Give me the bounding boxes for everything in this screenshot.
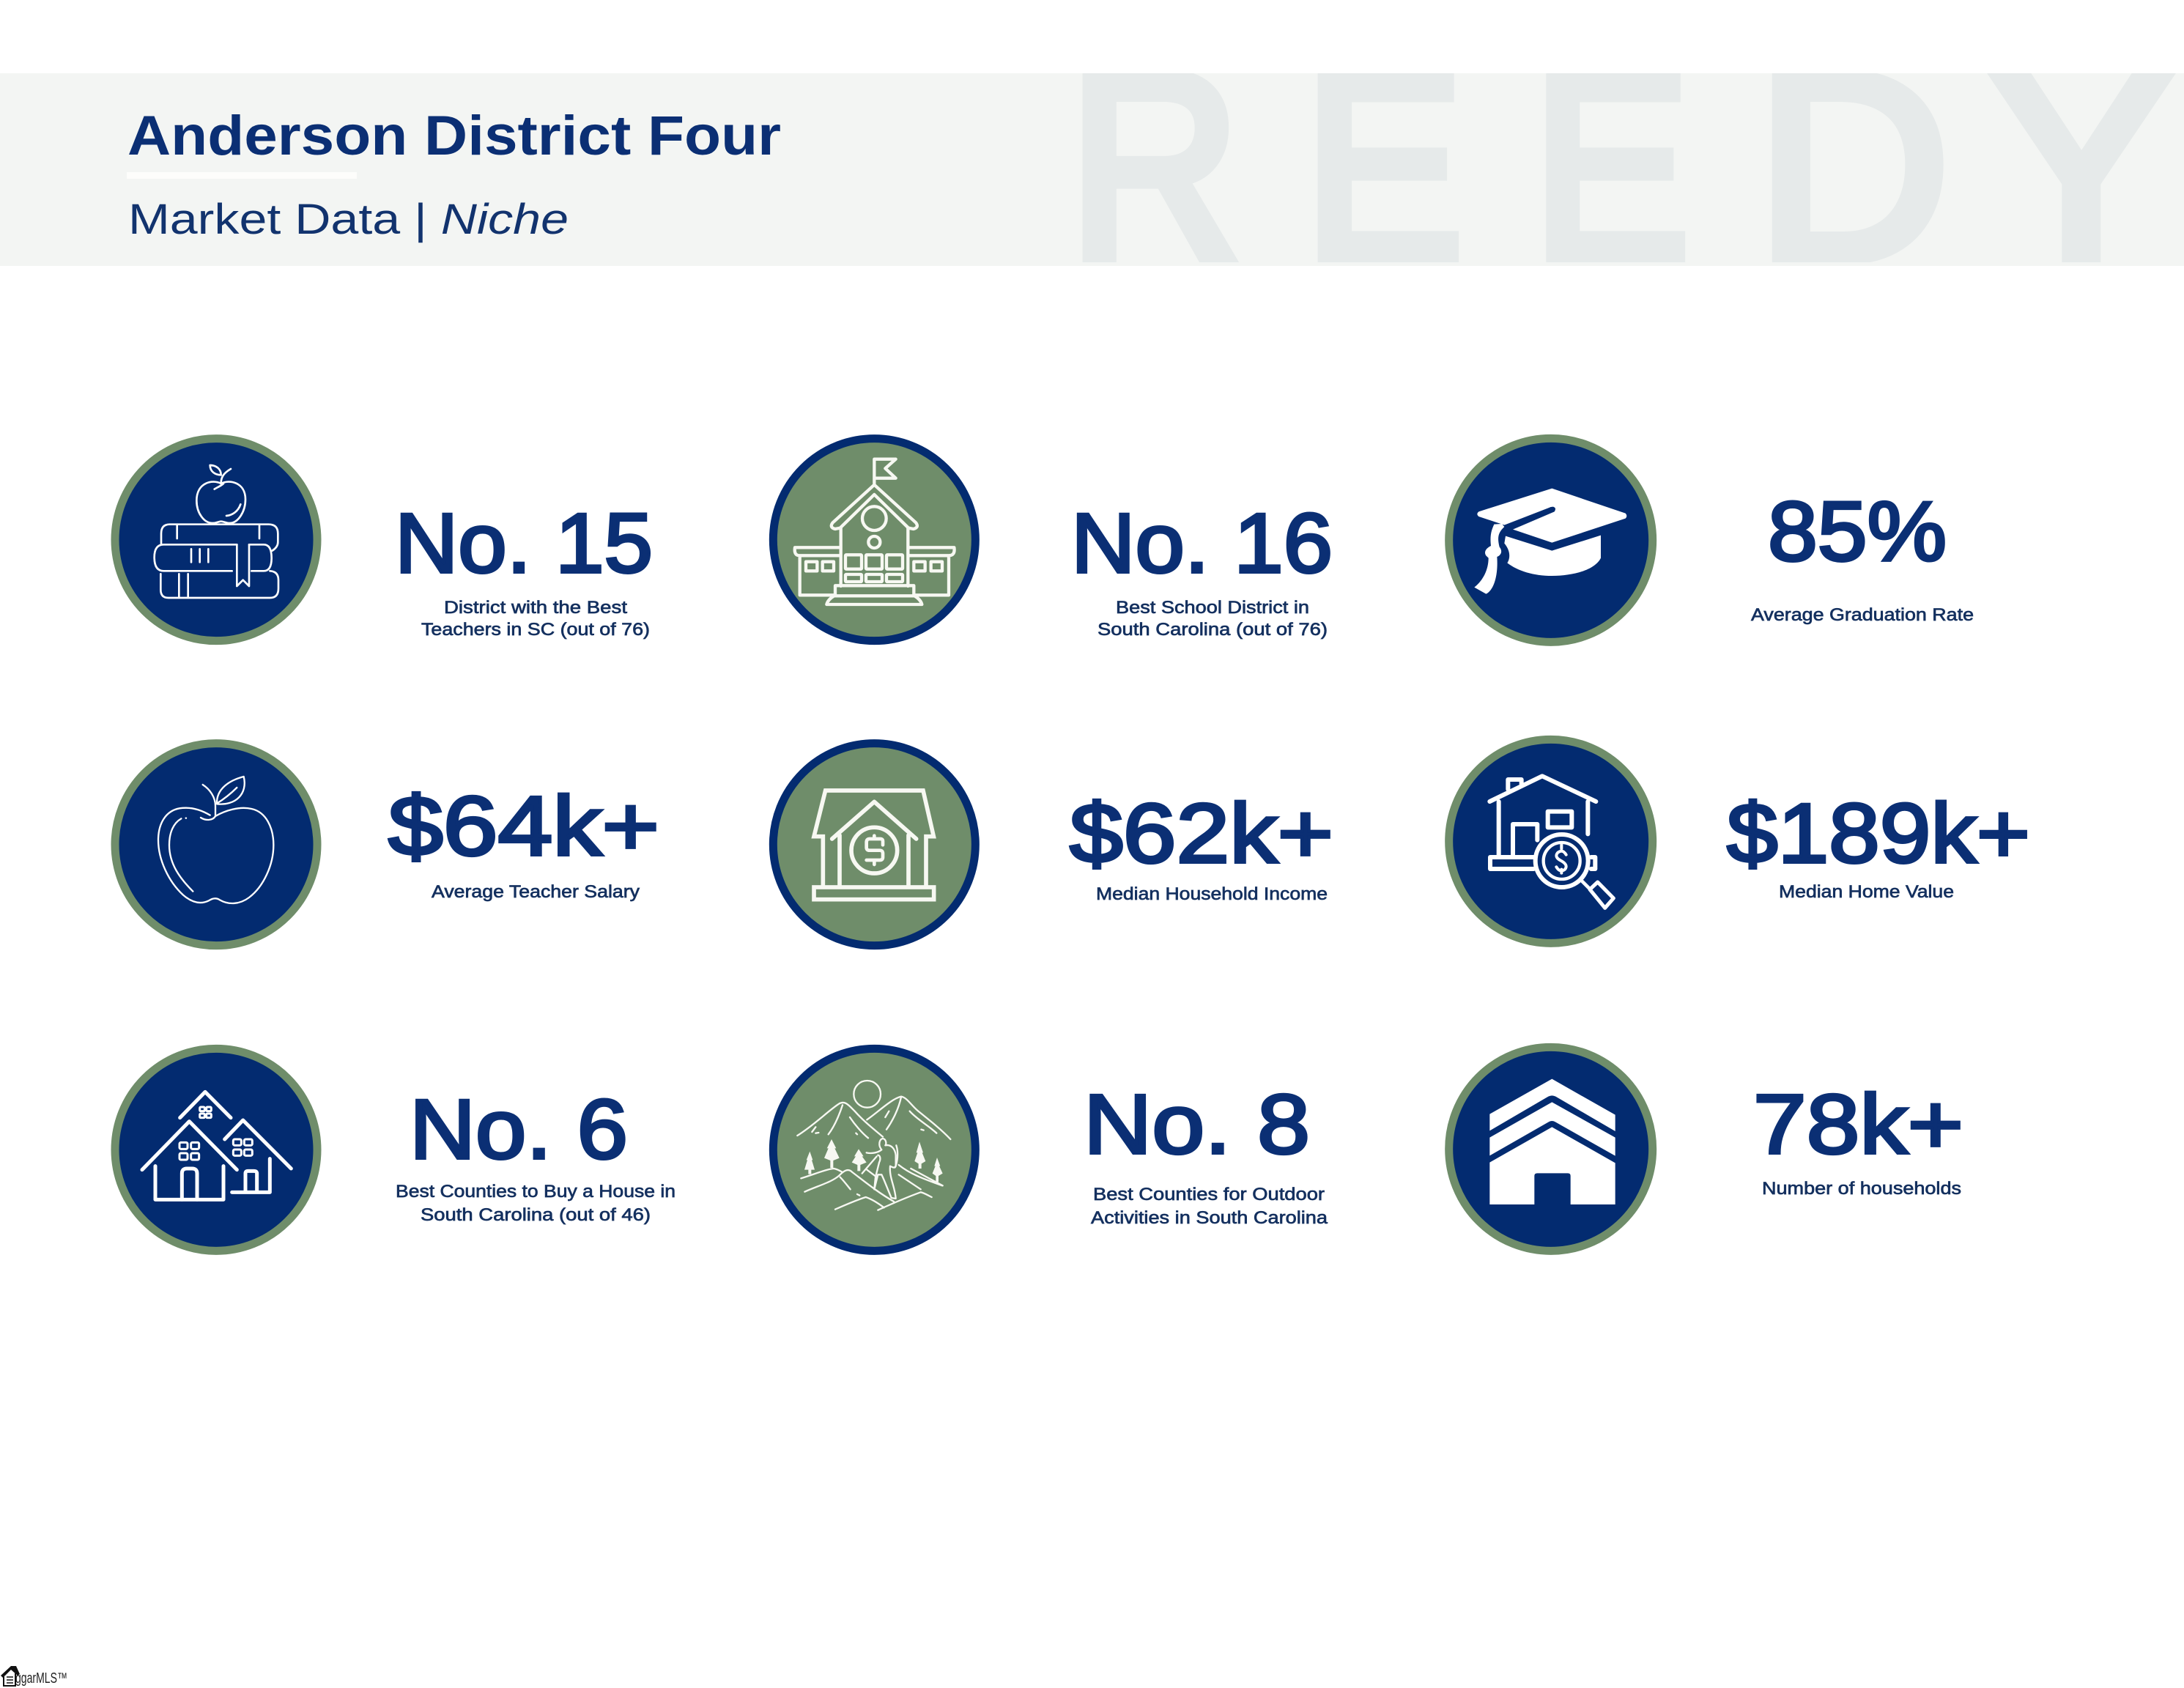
icon: solid house with chevrons: [1449, 1047, 1653, 1251]
stat 8: outdoor activities: [773, 1048, 1328, 1251]
stat 1: teachers rank: [115, 439, 653, 641]
stat 4: teacher salary: [115, 744, 659, 946]
icon: house with dollar: [773, 744, 975, 946]
stat value: No. 16: [1071, 497, 1333, 591]
stat value: $189k+: [1727, 787, 2030, 881]
icon: school building: [773, 439, 975, 641]
watermark: REEDY: E: [1304, 18, 1463, 314]
subtitle: Market Data | Niche: [128, 196, 569, 243]
stat label: South Carolina (out of 46): [421, 1205, 651, 1225]
stat label: Average Graduation Rate: [1751, 605, 1974, 625]
stat label: Median Home Value: [1779, 882, 1954, 902]
icon: apple: [115, 744, 317, 946]
icon: graduation cap: [1449, 438, 1653, 642]
logo text: ggarMLS™: [15, 1670, 67, 1687]
stat value: 78k+: [1753, 1078, 1963, 1171]
stat value: No. 8: [1084, 1078, 1310, 1171]
footer logo: ggarMLS: [1, 1666, 67, 1687]
stat 3: graduation rate: [1449, 438, 1974, 642]
stat label: Median Household Income: [1096, 884, 1328, 904]
icon: logo house: [1, 1666, 20, 1686]
stat 2: best school district: [773, 439, 1333, 641]
icon: mountains and hiker: [773, 1048, 975, 1251]
stat label: Best Counties to Buy a House in: [396, 1182, 675, 1202]
stat label: Number of households: [1762, 1179, 1961, 1199]
stat 6: home value: [1449, 739, 2030, 943]
stat value: 85%: [1768, 485, 1947, 579]
stat value: $62k+: [1070, 787, 1333, 881]
watermark: REEDY: D: [1757, 18, 1950, 314]
watermark: REEDY: Y: [1991, 18, 2172, 314]
icon: house under magnifier: [1449, 739, 1653, 943]
stat label: Teachers in SC (out of 76): [421, 620, 650, 640]
header band: [0, 73, 2184, 266]
stat 5: household income: [773, 744, 1333, 946]
stat label: District with the Best: [444, 598, 627, 618]
stat label: Best School District in: [1116, 598, 1309, 618]
stat label: Average Teacher Salary: [432, 882, 640, 902]
title: Anderson District Four: [127, 105, 781, 167]
stat value: No. 6: [410, 1083, 628, 1177]
stat 7: counties to buy a house: [115, 1048, 675, 1251]
stat value: $64k+: [388, 780, 659, 873]
stat 9: households: [1449, 1047, 1963, 1251]
watermark: REEDY: E: [1533, 18, 1689, 314]
title underline: [127, 172, 357, 179]
stat label: Best Counties for Outdoor: [1093, 1185, 1325, 1204]
stat label: Activities in South Carolina: [1091, 1208, 1328, 1228]
icon: apple on books: [115, 439, 317, 641]
icon: three houses: [115, 1048, 317, 1251]
watermark: REEDY: R: [1069, 18, 1240, 314]
stat value: No. 15: [395, 497, 653, 591]
stat label: South Carolina (out of 76): [1097, 620, 1328, 640]
